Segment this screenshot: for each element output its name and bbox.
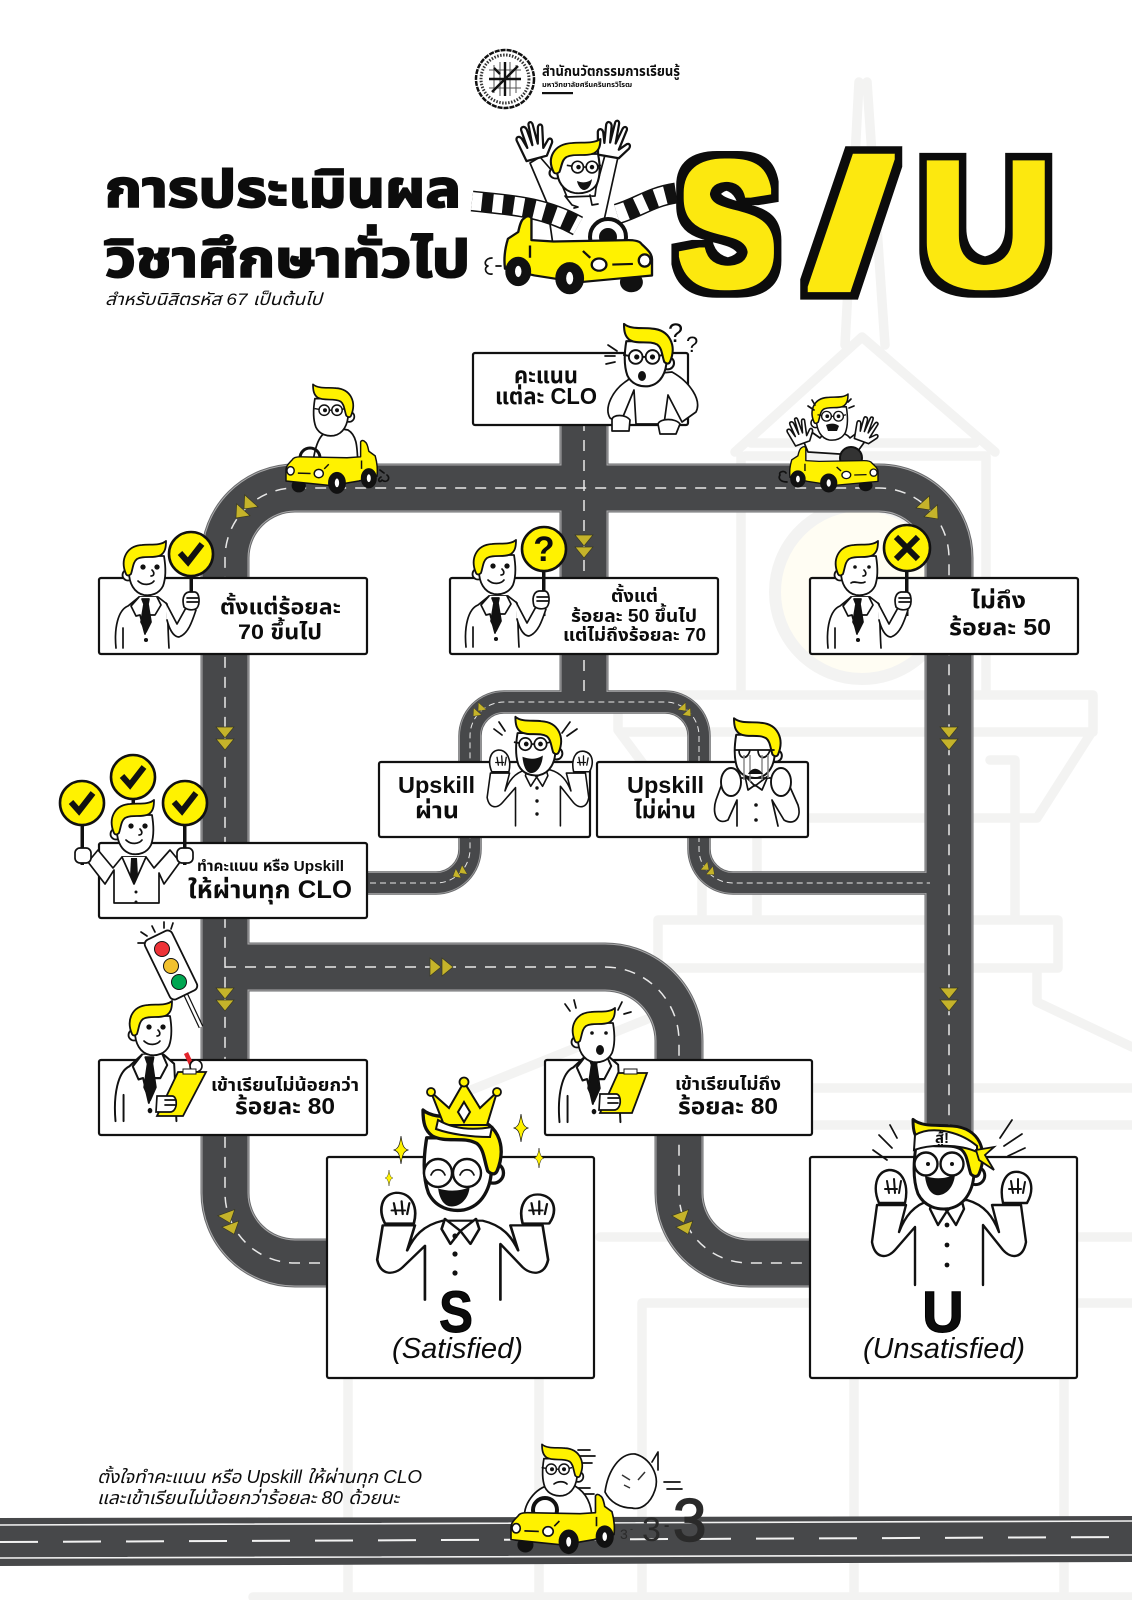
icon: angry driver chased by ghost: 3 <box>642 1511 661 1549</box>
box: below 50 percent <box>810 525 1078 654</box>
road direction arrows <box>216 495 958 1237</box>
box: from 50 up but below 70 <box>450 527 718 654</box>
panel: U unsatisfied: U <box>922 1280 964 1345</box>
box: upskill passed: ผ่าน <box>415 797 459 823</box>
icon: angry driver chased by ghost: - <box>664 1517 669 1534</box>
box: upskill failed: Upskill <box>627 772 704 798</box>
icon: traffic light <box>138 922 201 1027</box>
box: from 50 up but below 70: ตั้งแต่ <box>611 584 658 606</box>
big S/U heading: S <box>677 125 777 325</box>
icon: crowned happy man <box>377 1078 554 1300</box>
icon: determined man with headband: สู้! <box>935 1129 949 1148</box>
title: วิชาศึกษาทั่วไป <box>105 225 470 289</box>
icon: man holding question sign <box>466 527 566 647</box>
box: from 50 up but below 70: ร้อยละ 50 ขึ้นไป <box>571 603 697 626</box>
icon: man holding cross sign <box>828 525 930 648</box>
icon: angry driver chased by ghost <box>511 1444 706 1554</box>
panel: U unsatisfied <box>810 1119 1077 1378</box>
logo: office of learning innovation: สำนักนวัตกรรมการเรียนรู้ <box>542 63 680 81</box>
closing reminder text: และเข้าเรียนไม่น้อยกว่าร้อยละ 80 ด้วยนะ <box>97 1488 401 1508</box>
box: from 70 percent up <box>99 532 367 654</box>
big S/U heading: / <box>807 124 897 324</box>
icon: driver left on road <box>286 384 389 493</box>
title: การประเมินผล <box>105 161 461 219</box>
box: score or upskill pass all CLO: ทำคะแนน หรือ Upskill <box>197 858 344 875</box>
icon: angry driver chased by ghost: 3 <box>620 1526 628 1542</box>
big S/U heading: U <box>918 124 1054 324</box>
panel: S satisfied: (Satisfied) <box>392 1333 523 1365</box>
box: attended at least 80: เข้าเรียนไม่น้อยกว่า <box>211 1075 359 1095</box>
logo: office of learning innovation <box>476 50 680 108</box>
box: upskill failed <box>597 718 808 837</box>
panel: U unsatisfied: (Unsatisfied) <box>863 1333 1025 1365</box>
icon: man holding question sign: ? <box>533 530 555 569</box>
icon: man holding tick sign <box>116 532 213 648</box>
icon: confused man with question marks: ? <box>668 318 683 348</box>
subtitle: สำหรับนิสิตรหัส 67 เป็นต้นไป <box>105 290 325 309</box>
logo: office of learning innovation: มหาวิทยาลัยศรีนครินทรวิโรฒ <box>542 81 632 89</box>
box: upskill passed: Upskill <box>398 772 475 798</box>
box: attended at least 80 <box>99 1001 367 1135</box>
box: attended at least 80: ร้อยละ 80 <box>235 1093 335 1119</box>
icon: man cheering in car with scarf <box>472 118 676 293</box>
icon: confused man with question marks: ? <box>686 332 698 357</box>
icon: man with three tick signs <box>60 755 207 904</box>
icon: man with clipboard and pen <box>115 1001 206 1121</box>
box: score per CLO: คะแนน <box>514 362 578 388</box>
icon: determined man with headband <box>872 1119 1031 1285</box>
big S/U heading <box>677 124 1054 325</box>
box: upskill failed: ไม่ผ่าน <box>634 797 696 823</box>
panel: S satisfied <box>327 1078 594 1378</box>
icon: man crying <box>714 718 799 826</box>
box: from 70 percent up: 70 ขึ้นไป <box>238 617 322 644</box>
title <box>105 161 470 289</box>
box: below 50 percent: ไม่ถึง <box>971 587 1026 613</box>
box: upskill passed <box>379 717 592 837</box>
box: attended below 80: ร้อยละ 80 <box>678 1093 778 1119</box>
box: from 70 percent up: ตั้งแต่ร้อยละ <box>220 593 341 619</box>
box: attended below 80: เข้าเรียนไม่ถึง <box>675 1074 781 1094</box>
box: attended below 80 <box>545 1000 812 1135</box>
box: below 50 percent: ร้อยละ 50 <box>949 614 1051 640</box>
box: from 50 up but below 70: แต่ไม่ถึงร้อยละ 70 <box>563 625 706 645</box>
background: faint temple building outline <box>253 82 1132 1597</box>
closing reminder text <box>97 1465 422 1508</box>
bottom highway <box>0 1516 1132 1566</box>
icon: shocked man with clipboard <box>559 1000 647 1122</box>
box: score or upskill pass all CLO <box>60 755 367 918</box>
panel: S satisfied: S <box>439 1280 473 1345</box>
closing reminder text: ตั้งใจทำคะแนน หรือ Upskill ให้ผ่านทุก CLO <box>97 1465 422 1488</box>
icon: angry driver chased by ghost: - <box>630 1524 633 1534</box>
road network <box>225 420 949 1263</box>
box: score per CLO: แต่ละ CLO <box>495 383 597 409</box>
box: score per CLO <box>473 353 688 425</box>
icon: man cheering with fists <box>487 717 592 826</box>
icon: panicking driver right on road <box>779 394 883 492</box>
icon: angry driver chased by ghost: 3 <box>673 1487 706 1554</box>
box: score or upskill pass all CLO: ให้ผ่านทุก CLO <box>188 876 352 905</box>
icon: confused man with question marks <box>605 318 698 434</box>
icon: sparkles <box>385 1114 544 1186</box>
